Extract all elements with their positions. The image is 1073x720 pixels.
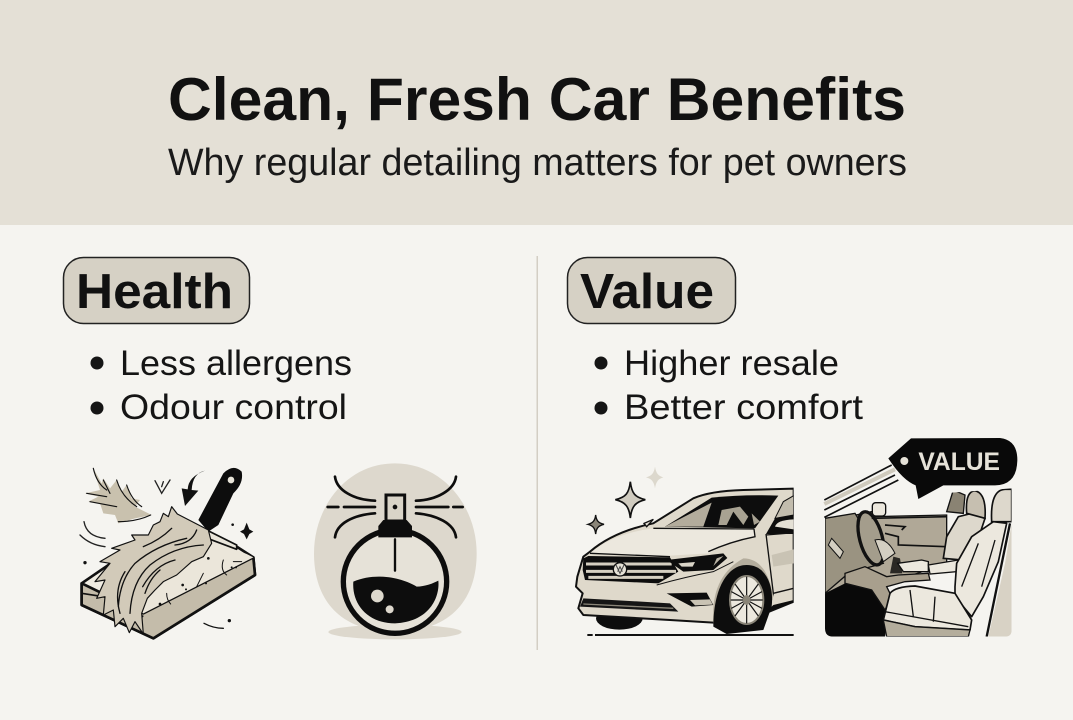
- icon: sedan car with sparkles: [576, 467, 794, 636]
- heading: value: [568, 258, 736, 324]
- icon: fur brush on car seat: [80, 468, 255, 638]
- title: Clean, Fresh Car Benefits: [168, 66, 906, 133]
- icon: car interior with value tag: [815, 438, 1022, 640]
- panel: health: [64, 258, 477, 639]
- icon: car interior with value tag: VALUE: [918, 449, 1000, 476]
- icon: perfume bottle air freshener: [314, 463, 477, 639]
- health bullet list: [90, 344, 352, 427]
- heading: value: Value: [580, 265, 714, 319]
- health bullet list: Odour control: [120, 388, 347, 427]
- value bullet list: Higher resale: [624, 344, 839, 383]
- health bullet list: Less allergens: [120, 344, 352, 383]
- subtitle: Why regular detailing matters for pet owners: [168, 142, 907, 184]
- heading: health: [64, 258, 250, 324]
- value bullet list: [594, 344, 863, 427]
- value bullet list: Better comfort: [624, 388, 863, 427]
- heading: health: Health: [76, 265, 233, 319]
- panel: value: [568, 258, 1022, 640]
